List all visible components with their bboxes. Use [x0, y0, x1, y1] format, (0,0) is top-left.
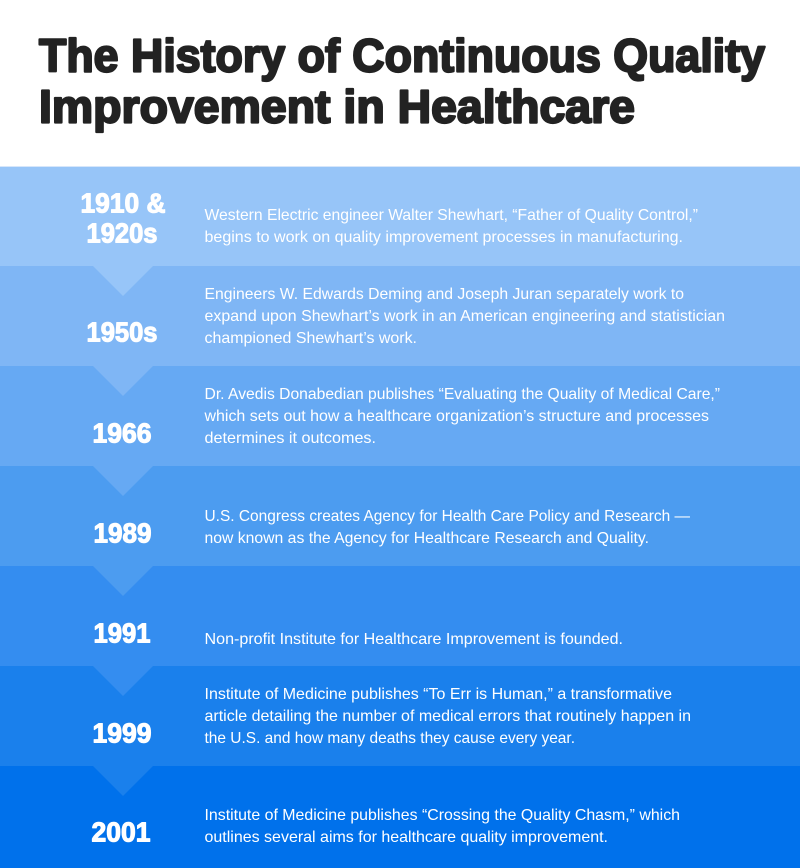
panel: 1966: [0, 366, 800, 466]
year: 1989: 1989: [94, 518, 152, 548]
text: To Err is Human: [204, 686, 691, 747]
text: Donabedian: Dr. Avedis Donabedian publishes “Evaluating the Quality of Medical Care,”: [204, 386, 720, 403]
text: U.S. Congress: U.S. Congress creates Agency for Health Care Policy and Research —: [204, 508, 690, 525]
text: Institute for Healthcare Improvement: Non-profit Institute for Healthcare Improvement is founded.: [204, 631, 623, 648]
text: To Err is Human: Institute of Medicine publishes “To Err is Human,” a transformative: [204, 686, 672, 703]
year: 1966: 1966: [92, 418, 152, 448]
year: 1950s: 1950s: [86, 316, 158, 348]
arrow: from 1966 to 1989: [93, 466, 153, 496]
text: Deming and Juran: [204, 286, 725, 347]
year: 1910 & 1920s: 1910 &: [80, 188, 166, 218]
year: 1910 & 1920s: [80, 188, 166, 248]
text: Deming and Juran: championed Shewhart’s work.: [204, 330, 417, 347]
text: Crossing the Quality Chasm: outlines several aims for healthcare quality improvement.: [204, 829, 608, 846]
arrow: from 1910 and 1920s to 1950s: [93, 266, 153, 296]
text: Deming and Juran: expand upon Shewhart’s work in an American engineering and statistician: [204, 308, 725, 325]
text: To Err is Human: the U.S. and how many deaths they cause every year.: [204, 730, 575, 747]
text: Crossing the Quality Chasm: [204, 807, 680, 846]
title: Improvement in Healthcare: [39, 81, 635, 133]
text: To Err is Human: article detailing the number of medical errors that routinely happen in: [204, 708, 691, 725]
text: Deming and Juran: Engineers W. Edwards Deming and Joseph Juran separately work to: [204, 286, 684, 303]
text: Walter Shewhart: [204, 207, 698, 246]
title: [39, 30, 765, 133]
arrow: from 1989 to 1991: [93, 566, 153, 596]
text: Donabedian: which sets out how a healthcare organization’s structure and processes: [204, 408, 709, 425]
text: U.S. Congress: [204, 508, 690, 547]
arrow: from 1950s to 1966: [93, 366, 153, 396]
text: Donabedian: determines it outcomes.: [204, 430, 376, 447]
panel: 2001: [0, 766, 800, 868]
year: 2001: 2001: [92, 816, 150, 848]
title: The History of Continuous Quality: [39, 30, 765, 82]
year: 1910 & 1920s: 1920s: [86, 218, 158, 248]
year: 1999: 1999: [92, 718, 152, 748]
year: 1991: 1991: [94, 618, 150, 648]
text: U.S. Congress: now known as the Agency for Healthcare Research and Quality.: [204, 530, 649, 547]
panel: 1950s: [0, 266, 800, 366]
arrow: from 1991 to 1999: [93, 666, 153, 696]
panel: 1989: [0, 466, 800, 566]
text: Donabedian: [204, 386, 720, 447]
panel: 1910 and 1920s: [0, 167, 800, 266]
panel: 1991: [0, 566, 800, 666]
panel: 1999: [0, 666, 800, 766]
arrow: from 1999 to 2001: [93, 766, 153, 796]
text: Walter Shewhart: begins to work on quality improvement processes in manufacturing.: [204, 229, 683, 246]
text: Walter Shewhart: Western Electric engineer Walter Shewhart, “Father of Quality Control,”: [204, 207, 698, 224]
text: Crossing the Quality Chasm: Institute of Medicine publishes “Crossing the Quality Chasm,” which: [204, 807, 680, 824]
